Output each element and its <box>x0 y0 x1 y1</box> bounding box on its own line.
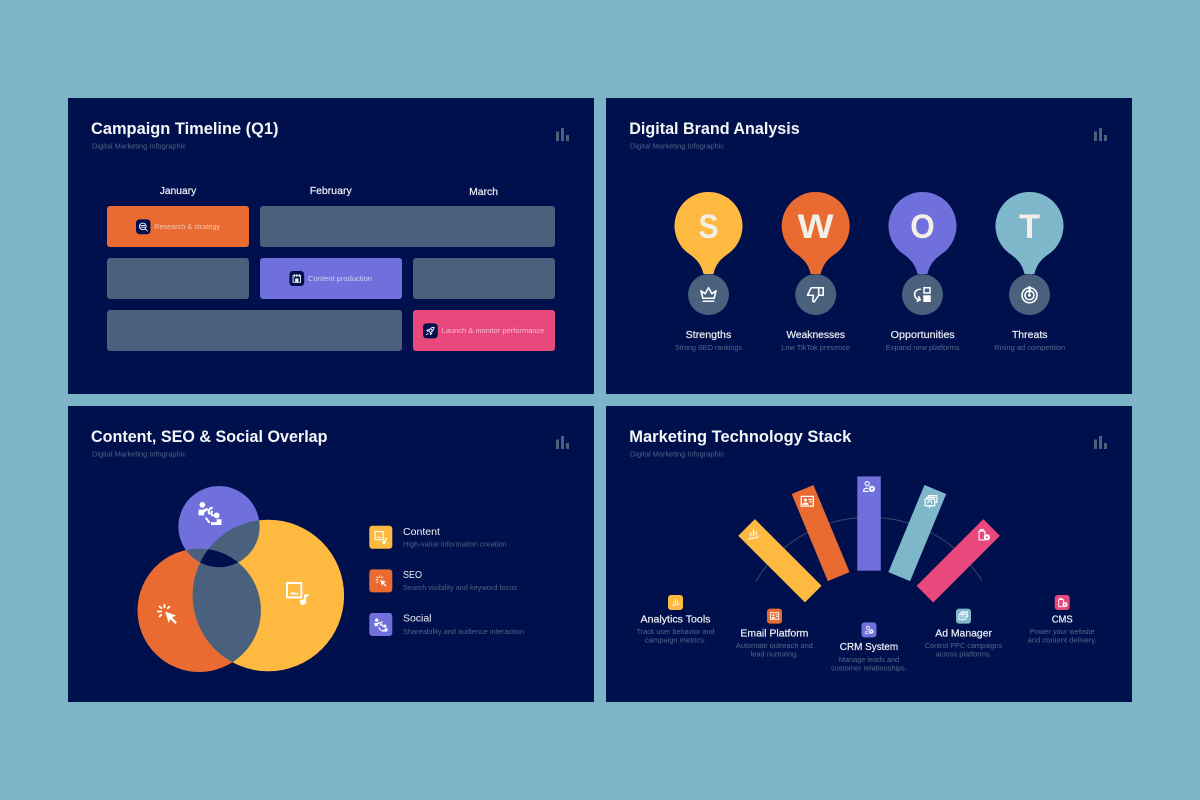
icon: bars logo <box>556 128 569 141</box>
empty track: row three <box>107 310 402 351</box>
swot item: opportunities <box>886 192 960 352</box>
bar icon: email <box>801 496 813 506</box>
empty track: row two right <box>413 258 555 299</box>
item: CRM system <box>831 622 907 672</box>
item: analytics tools: Track user behavior and <box>636 627 714 636</box>
icon: click cursor <box>158 604 177 624</box>
legend: SEO <box>369 569 517 592</box>
bar: CMS <box>917 519 1000 602</box>
legend: social: Social <box>403 614 432 625</box>
item: ad manager <box>925 609 1003 658</box>
panel: marketing technology stack <box>606 406 1132 702</box>
icon: image and music <box>287 583 308 605</box>
icon: bars logo <box>1094 436 1107 449</box>
month: March: March <box>469 186 498 198</box>
legend: SEO: Search visibility and keyword focus <box>403 583 517 592</box>
panel: campaign timeline <box>68 98 594 394</box>
item: CRM system: customer relationships. <box>831 663 907 672</box>
swot item: threats: T <box>1019 208 1040 246</box>
bar icon: chart <box>749 530 758 539</box>
venn circle: SEO <box>138 549 261 672</box>
swot item: threats: Rising ad competition <box>994 343 1065 352</box>
swot item: strengths: Strengths <box>686 329 731 341</box>
bar: analytics <box>738 519 822 602</box>
swot item: opportunities: Opportunities <box>891 329 955 341</box>
bar: ad manager <box>888 485 946 581</box>
bar icon: CRM <box>864 482 875 492</box>
bar icon: clipboard <box>979 530 990 540</box>
task: content production: Content production <box>308 274 372 283</box>
month: January: January <box>160 185 197 197</box>
subtitle: Digital Marketing Infographic <box>630 141 724 150</box>
overlap: content and social <box>208 520 260 562</box>
fan chart <box>738 476 1000 602</box>
task: research and strategy <box>107 206 249 247</box>
venn diagram <box>138 486 344 672</box>
item: CRM system: Manage leads and <box>839 655 899 664</box>
item: CMS <box>1028 595 1097 644</box>
item: CMS: Power your website <box>1030 627 1095 636</box>
swot item: weaknesses <box>781 192 850 352</box>
swot item: opportunities: Expand new platforms <box>886 343 960 352</box>
swot item: threats <box>994 192 1065 352</box>
venn circle: social <box>178 486 260 567</box>
icon: bars logo <box>556 436 569 449</box>
legend: content <box>369 526 507 549</box>
swot item: threats: Threats <box>1012 329 1047 341</box>
item: CMS: and content delivery. <box>1028 636 1097 644</box>
swot item: weaknesses: Low TikTok presence <box>781 343 850 352</box>
item: email platform: Email Platform <box>740 628 809 640</box>
month: February: February <box>310 185 352 197</box>
item: ad manager: Ad Manager <box>935 628 992 640</box>
heading: overlap: Content, SEO & Social Overlap <box>91 427 328 446</box>
heading: digital brand analysis: Digital Brand Analysis <box>629 119 800 138</box>
heading: campaign timeline: Campaign Timeline (Q1) <box>91 119 278 138</box>
subtitle: Digital Marketing Infographic <box>92 449 186 458</box>
bar icon: monitor <box>925 496 937 507</box>
item: analytics tools: campaign metrics. <box>645 636 706 644</box>
task: launch and monitor performance: Launch & monitor performance <box>442 326 544 335</box>
venn circle: content <box>192 520 344 671</box>
task: content production <box>260 258 402 299</box>
icon: bars logo <box>1094 128 1107 141</box>
legend: content: High-value information creation <box>403 540 507 549</box>
panel: SWOT brand analysis <box>606 98 1132 394</box>
subtitle: Digital Marketing Infographic <box>92 141 186 150</box>
task: launch and monitor performance <box>413 310 555 351</box>
overlap: all three <box>200 549 238 567</box>
overlap: SEO and social <box>186 548 208 562</box>
swot item: strengths: Strong SEO rankings <box>675 343 742 352</box>
empty track: row two left <box>107 258 249 299</box>
swot item: weaknesses: Weaknesses <box>786 329 845 341</box>
task: research and strategy: Research & strategy <box>154 222 220 231</box>
item: email platform <box>736 609 813 658</box>
swot item: weaknesses: W <box>798 208 835 246</box>
item: email platform: lead nurturing. <box>751 649 798 658</box>
bar: email <box>792 485 850 581</box>
empty track: row one <box>260 206 555 247</box>
heading: marketing technology stack: Marketing Technology Stack <box>629 427 852 446</box>
subtitle: Digital Marketing Infographic <box>630 449 724 458</box>
legend: social: Shareability and audience interaction <box>403 627 524 636</box>
swot item: strengths <box>674 192 742 352</box>
legend: social <box>369 613 524 636</box>
item: ad manager: across platforms. <box>936 649 992 658</box>
item: analytics tools <box>636 595 714 644</box>
item: ad manager: Control PPC campaigns <box>925 641 1003 650</box>
legend: content: Content <box>403 527 440 538</box>
bar: CRM <box>857 476 881 571</box>
item: analytics tools: Analytics Tools <box>640 614 710 626</box>
panel: content SEO social overlap <box>68 406 594 702</box>
legend: SEO: SEO <box>403 570 422 581</box>
item: CRM system: CRM System <box>840 641 898 653</box>
item: email platform: Automate outreach and <box>736 641 813 650</box>
item: CMS: CMS <box>1052 614 1073 626</box>
icon: people signal <box>198 502 222 525</box>
overlap: content and SEO <box>192 562 261 662</box>
arc behind the fan <box>756 517 982 581</box>
swot item: strengths: S <box>698 208 718 246</box>
swot item: opportunities: O <box>910 208 935 246</box>
